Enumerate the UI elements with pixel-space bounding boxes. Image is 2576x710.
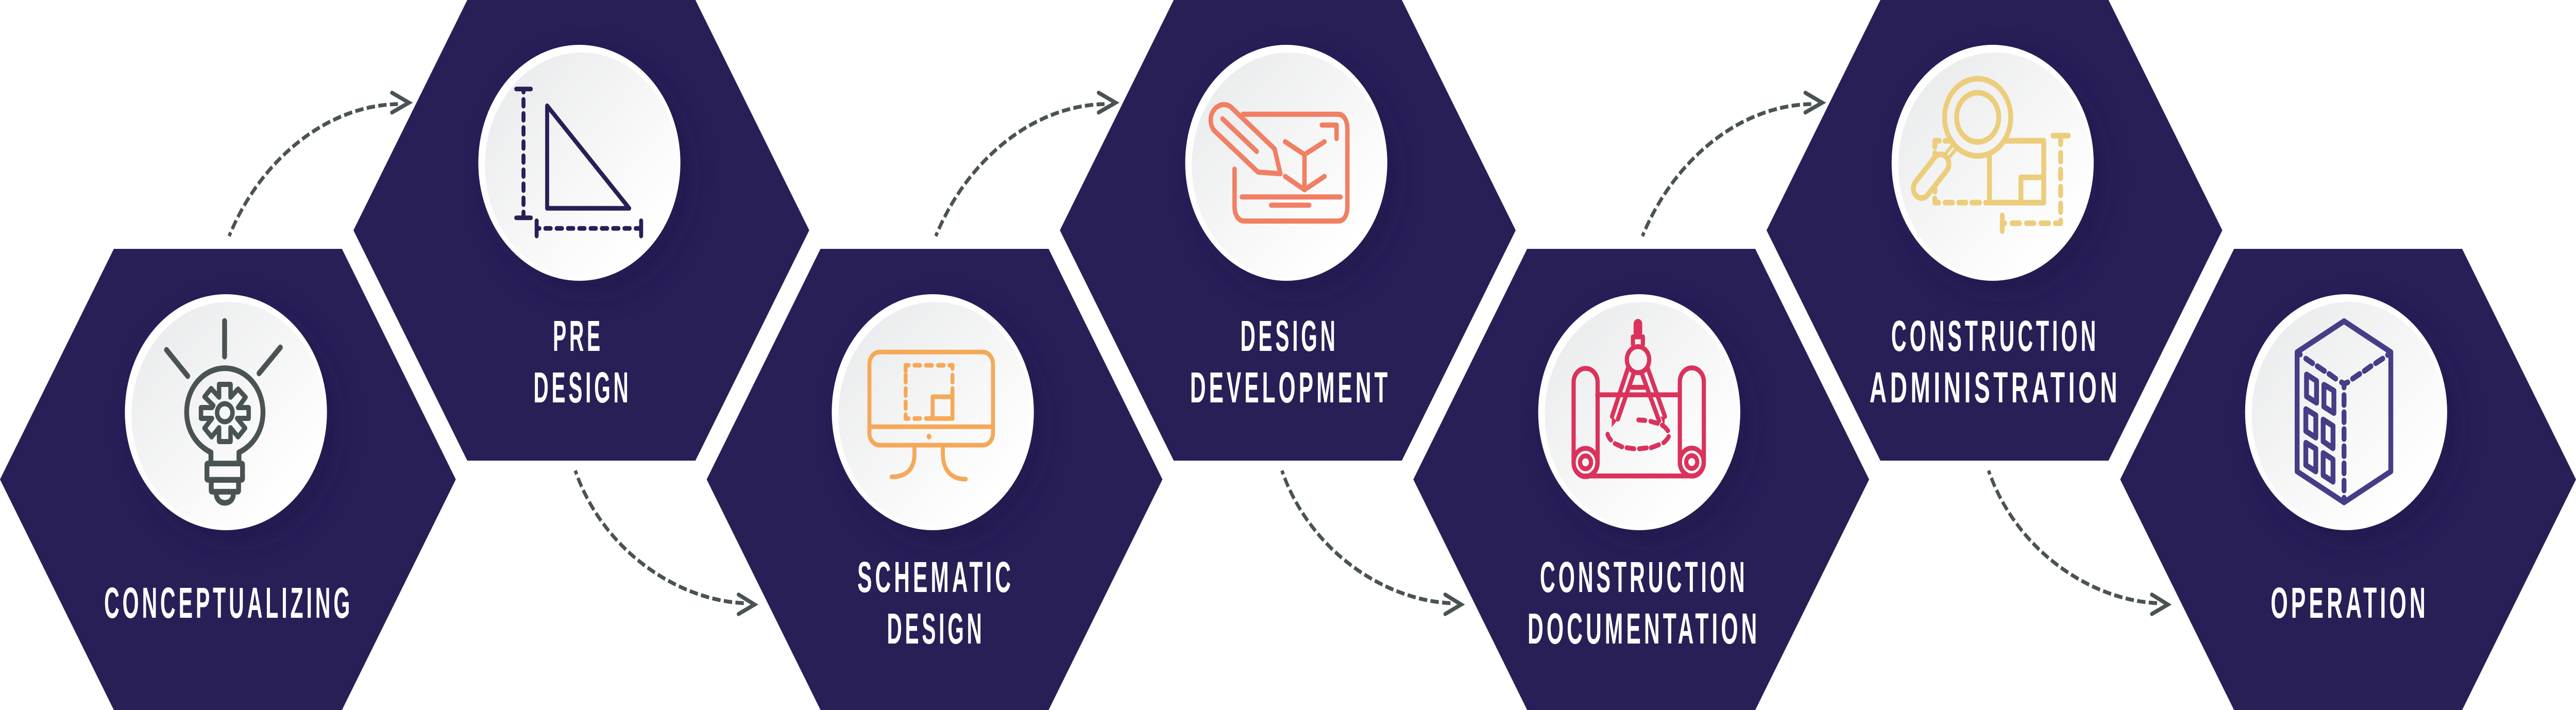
circle badge	[1538, 294, 1751, 543]
panel: conceptualizing	[0, 249, 456, 710]
circle badge	[478, 45, 691, 293]
label: CONCEPTUALIZING	[104, 579, 353, 627]
icon: light bulb with gear	[166, 321, 280, 503]
hexagon background	[1767, 0, 2223, 461]
icon: triangle with dimensions	[516, 89, 641, 236]
label	[533, 312, 632, 412]
label: SCHEMATIC	[857, 553, 1014, 601]
icon: magnifier over plan	[1910, 79, 2068, 231]
label: PRE	[553, 312, 603, 360]
arrow: pre design to schematic design	[575, 470, 755, 614]
hexagon background	[1413, 249, 1869, 710]
icon: blueprint and compass	[1573, 319, 1704, 477]
icon: tablet with pencil and cube	[1211, 105, 1347, 221]
label	[857, 553, 1014, 653]
hexagon background	[0, 249, 456, 710]
arrow: construction administration to operation	[1989, 470, 2168, 614]
label: OPERATION	[2270, 579, 2429, 627]
panel: schematic design	[707, 249, 1162, 710]
panel: construction documentation	[1413, 249, 1869, 710]
label: DEVELOPMENT	[1190, 363, 1391, 412]
label	[1190, 312, 1391, 412]
hexagon background	[2120, 249, 2576, 710]
hexagon background	[353, 0, 809, 461]
label	[1870, 312, 2121, 412]
label: DESIGN	[1241, 312, 1338, 360]
label: ADMINISTRATION	[1870, 363, 2121, 412]
arrow: conceptualizing to pre design	[229, 93, 409, 236]
panel: construction administration	[1767, 0, 2223, 461]
arrow: construction documentation to construction administration	[1642, 93, 1822, 236]
circle badge	[1892, 45, 2104, 293]
circle badge	[2245, 294, 2458, 543]
label: CONSTRUCTION	[1540, 553, 1748, 601]
icon: monitor with plan	[869, 352, 993, 479]
hexagon background	[1060, 0, 1516, 461]
panel: pre design	[353, 0, 809, 461]
label: DESIGN	[533, 363, 632, 412]
label: DESIGN	[887, 604, 985, 653]
arrow: design development to construction documentation	[1282, 470, 1461, 614]
circle badge	[832, 294, 1044, 543]
icon: isometric building	[2297, 321, 2391, 502]
label: CONSTRUCTION	[1891, 312, 2099, 360]
circle badge	[1185, 45, 1398, 293]
panel: design development	[1060, 0, 1516, 461]
panel: operation	[2120, 249, 2576, 710]
arrow: schematic design to design development	[936, 93, 1115, 236]
label: DOCUMENTATION	[1528, 604, 1760, 653]
circle badge	[125, 294, 337, 543]
label	[1528, 553, 1760, 653]
hexagon background	[707, 249, 1162, 710]
